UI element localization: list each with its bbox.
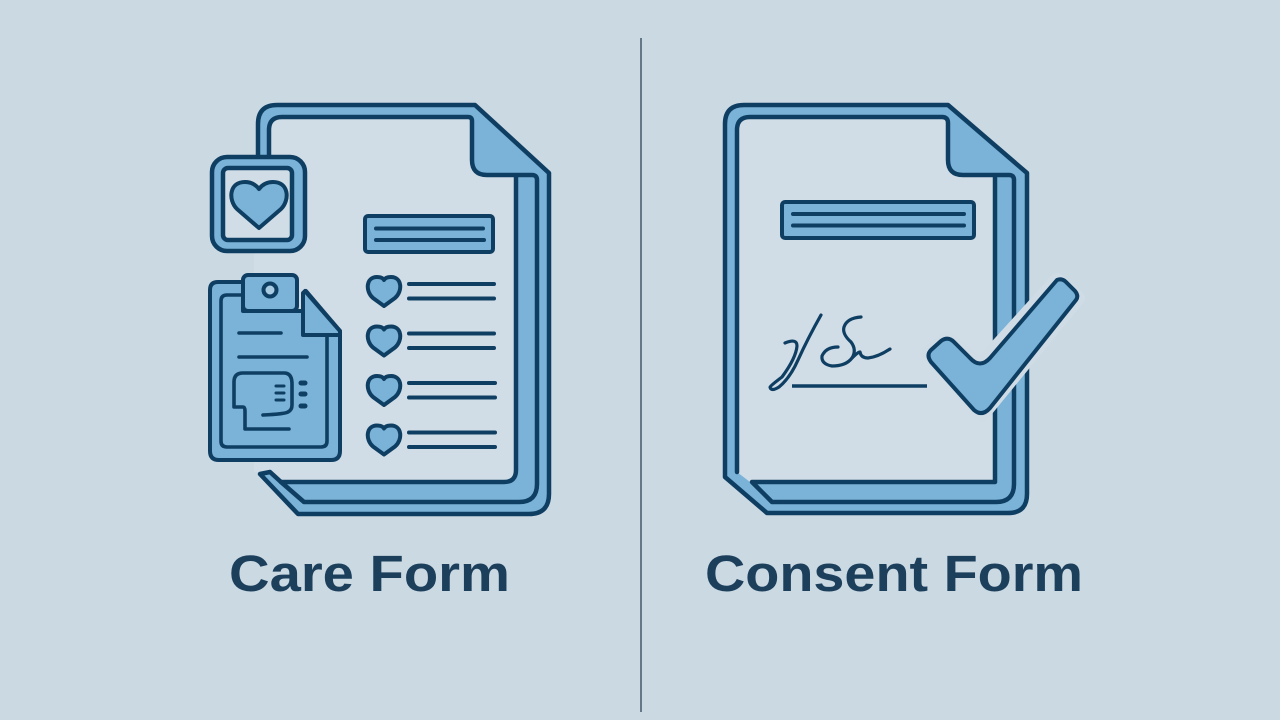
heading bar: [782, 202, 974, 238]
icon: heart badge: [212, 157, 305, 251]
panel: consent form: [705, 105, 1083, 602]
icon: check mark: [928, 279, 1078, 415]
item 4: [368, 426, 495, 454]
icon: clipboard document: [210, 275, 340, 460]
divider line: [640, 38, 642, 712]
panel: care form: [210, 105, 549, 602]
icon: consent form document: [725, 105, 1027, 513]
heading bar: [365, 216, 493, 252]
checklist of hearts: [368, 277, 495, 454]
item 1: [368, 277, 494, 306]
item 3: [368, 376, 495, 405]
icon: care form document: [254, 105, 549, 514]
label: consent form: Consent Form: [705, 545, 1083, 602]
label: care form: Care Form: [229, 545, 510, 602]
signature: [770, 315, 927, 390]
item 2: [368, 326, 494, 356]
